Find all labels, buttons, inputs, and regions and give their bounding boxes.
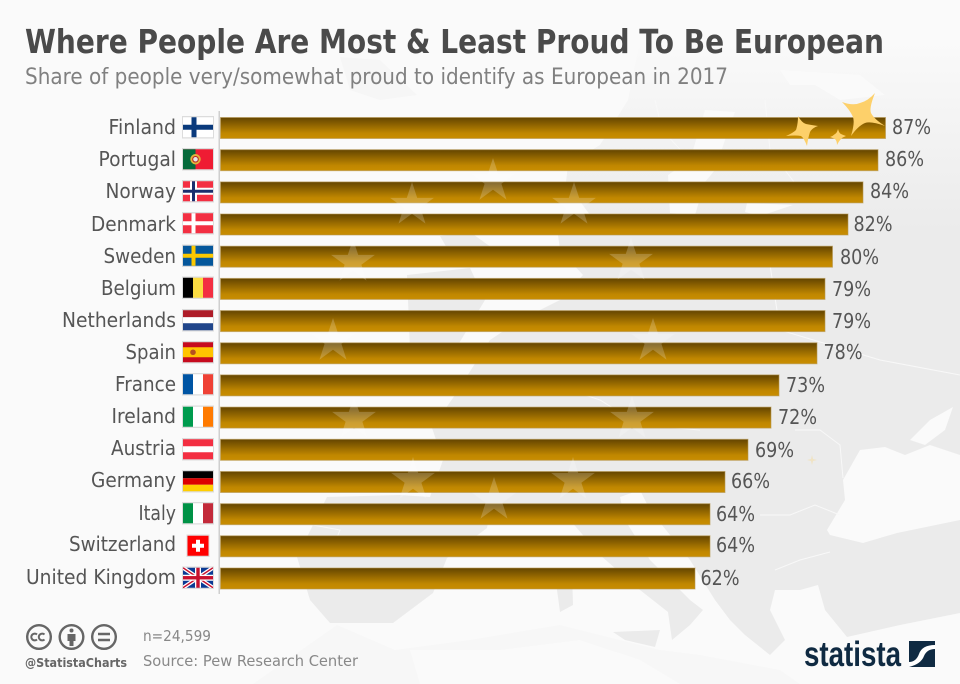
- flag: Switzerland: [188, 536, 208, 556]
- country labels: Austria: [111, 436, 176, 460]
- value labels: 79%: [832, 309, 871, 333]
- value labels: 66%: [731, 469, 770, 493]
- country labels: [26, 115, 176, 589]
- bar chart: [26, 111, 931, 594]
- value labels: 87%: [892, 115, 931, 139]
- value labels: 82%: [854, 212, 892, 236]
- flag: Germany: [183, 471, 213, 492]
- handle: @StatistaCharts: [25, 656, 127, 670]
- country labels: Belgium: [101, 276, 176, 300]
- flag: Sweden: [183, 246, 213, 266]
- value labels: 80%: [840, 245, 879, 269]
- country labels: United Kingdom: [26, 565, 176, 589]
- country labels: Italy: [138, 501, 176, 525]
- flag: Belgium: [183, 278, 213, 298]
- flag: Italy: [183, 503, 213, 524]
- country labels: Portugal: [98, 147, 176, 171]
- source: Source: Pew Research Center: [143, 652, 359, 670]
- value labels: 84%: [870, 179, 909, 203]
- value labels: 62%: [700, 566, 740, 590]
- value labels: 72%: [778, 405, 817, 429]
- flag: Portugal: [183, 149, 213, 170]
- footer: licence icons: [27, 625, 116, 649]
- value labels: 86%: [885, 147, 924, 171]
- map of Europe: [253, 40, 960, 684]
- country labels: Switzerland: [69, 532, 176, 556]
- sample size note: n=24,599: [143, 627, 211, 645]
- statista logo: statista: [804, 635, 901, 674]
- gold sparkles: [786, 93, 885, 465]
- icon: attribution: [60, 625, 83, 649]
- icon: no derivatives: [92, 625, 116, 649]
- flag: Austria: [183, 439, 213, 460]
- icon: statista mark: [909, 641, 935, 667]
- flag: Spain: [183, 342, 213, 362]
- value labels: 79%: [832, 277, 871, 301]
- value labels: 64%: [716, 502, 755, 526]
- icon: creative commons: [27, 625, 51, 649]
- flag: Norway: [183, 181, 213, 202]
- bars: [220, 118, 886, 589]
- value labels: 78%: [824, 340, 862, 364]
- EU circle of stars: [311, 158, 675, 519]
- value labels: [700, 115, 931, 590]
- flag: Netherlands: [183, 310, 213, 330]
- country labels: Germany: [91, 468, 176, 492]
- country labels: Finland: [108, 115, 176, 139]
- value labels: 64%: [716, 533, 755, 557]
- country labels: Sweden: [104, 244, 176, 268]
- flag: Ireland: [183, 406, 213, 427]
- value labels: 73%: [786, 373, 825, 397]
- flags: [182, 116, 214, 589]
- axis line: [218, 111, 220, 594]
- country labels: Spain: [126, 340, 176, 364]
- country labels: Denmark: [91, 212, 176, 236]
- flag: United Kingdom: [183, 568, 213, 588]
- value labels: 69%: [755, 438, 794, 462]
- flag: Finland: [183, 117, 213, 138]
- flag: France: [183, 374, 213, 394]
- country labels: Ireland: [112, 404, 176, 428]
- flag: Denmark: [183, 213, 213, 234]
- country labels: Netherlands: [62, 308, 176, 332]
- country labels: Norway: [106, 179, 176, 203]
- country labels: France: [115, 372, 176, 396]
- subtitle: Share of people very/somewhat proud to identify as European in 2017: [25, 65, 728, 90]
